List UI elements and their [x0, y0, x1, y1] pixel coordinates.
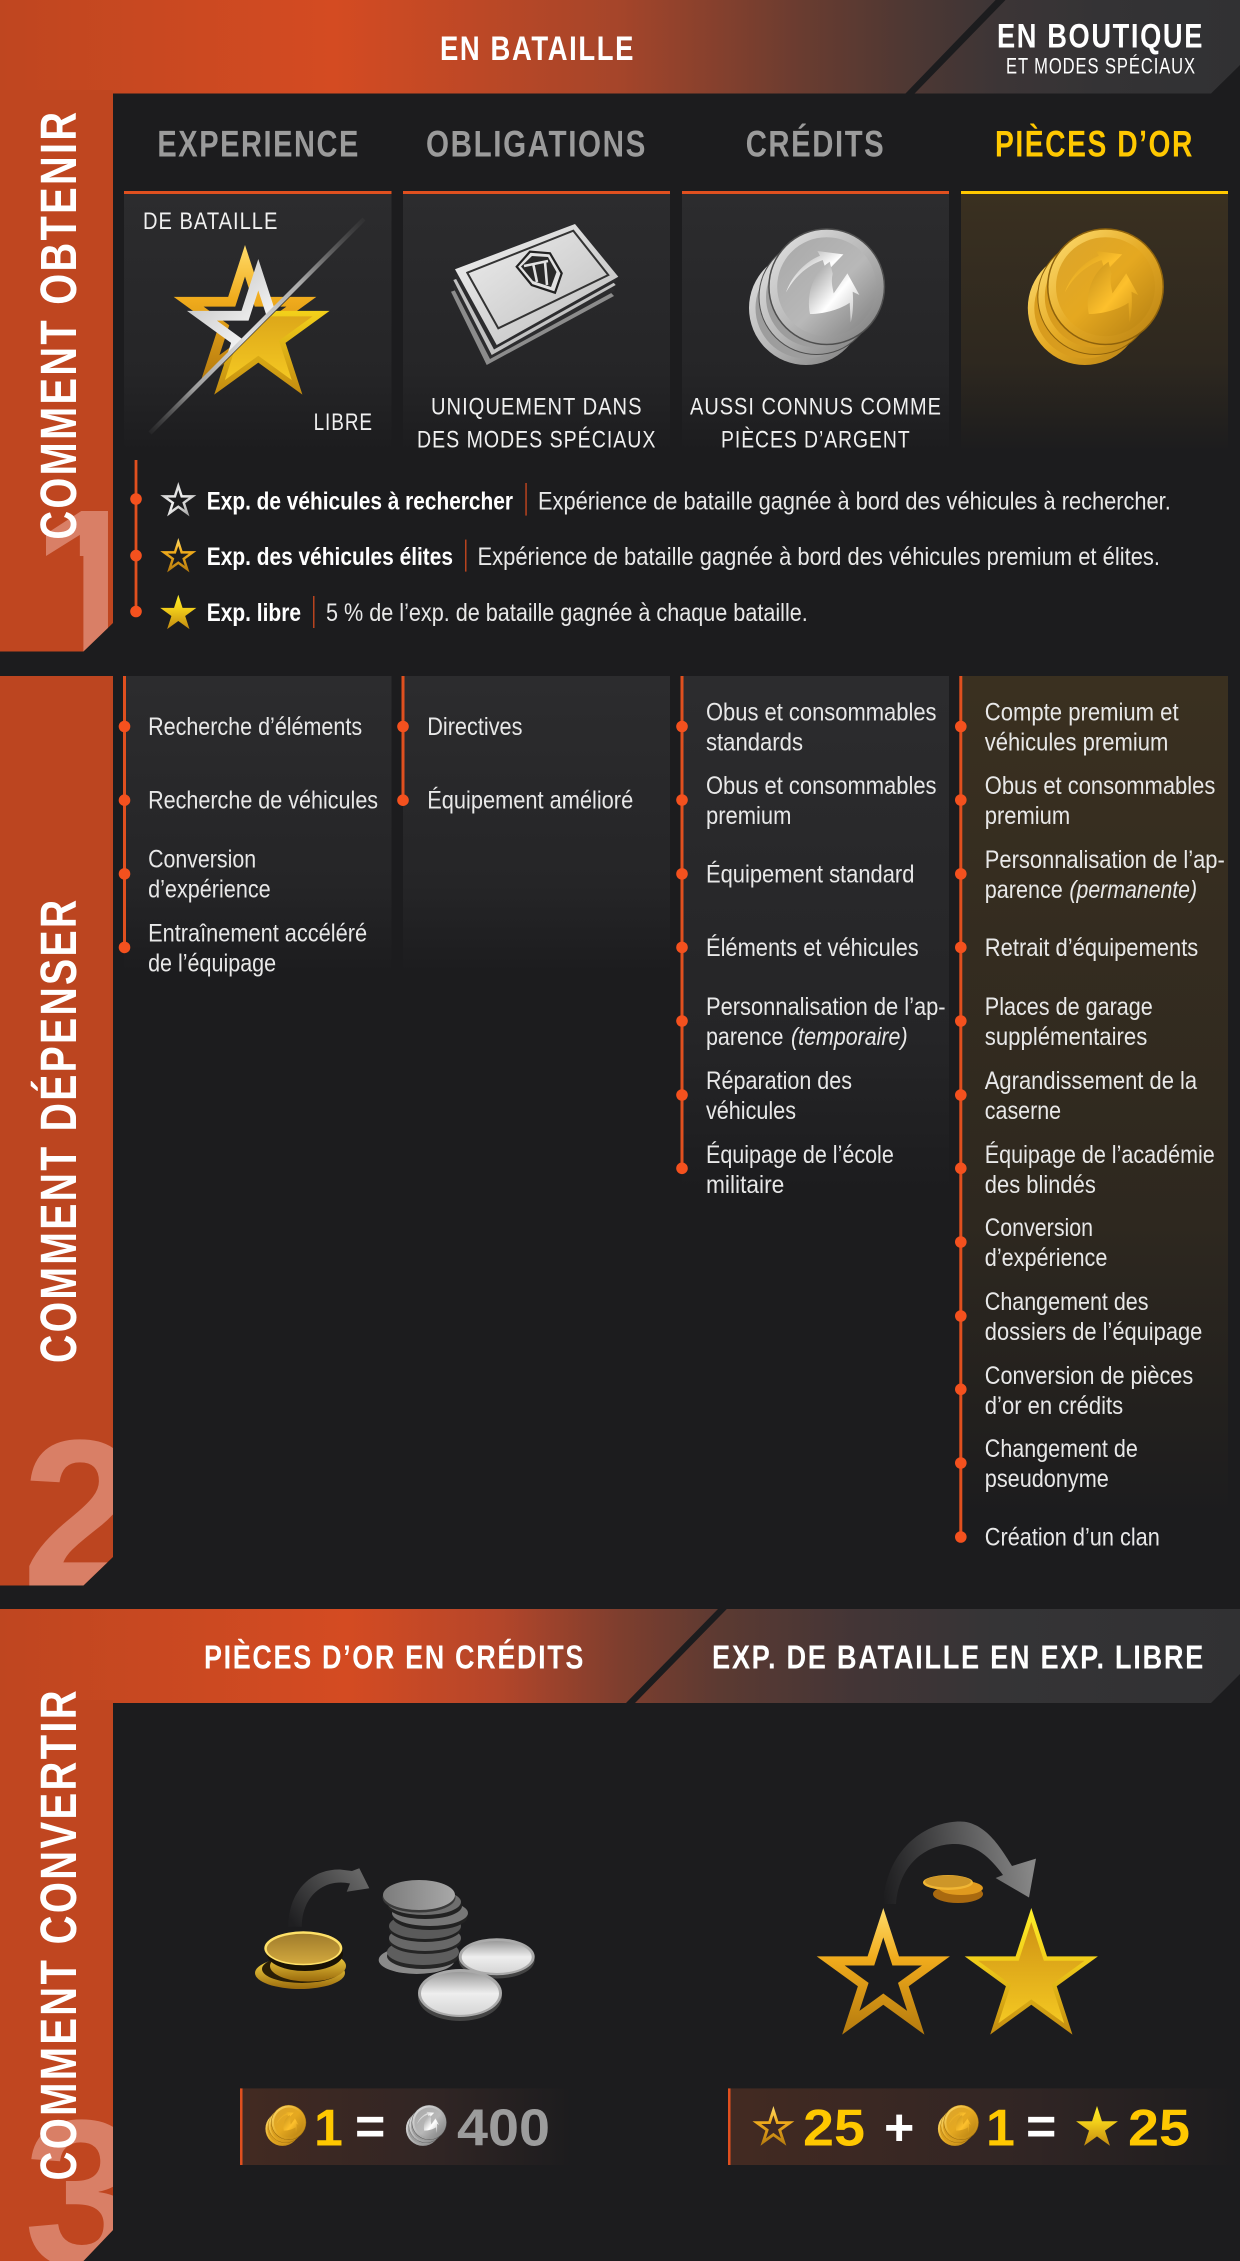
item: Agrandissement de la	[985, 1067, 1197, 1095]
icon: silver coins	[406, 2105, 447, 2146]
item: exp. de véhicules à rechercher	[130, 482, 1171, 516]
item: véhicules premium	[985, 728, 1168, 756]
header band: section 3	[0, 1609, 1240, 1703]
item: (temporaire)	[791, 1023, 908, 1051]
formula: 1 gold = 400 credits: =	[355, 2098, 385, 2156]
item: pseudonyme	[985, 1465, 1109, 1493]
item	[955, 1362, 1193, 1420]
item	[676, 698, 936, 756]
illustration: stars conversion	[817, 1822, 1098, 2035]
illustration: gold coins to silver coins	[255, 1868, 535, 2021]
item: Conversion	[148, 846, 256, 874]
item: exp. des véhicules élites: Exp. des véhicules élites	[207, 543, 453, 571]
item: Recherche de véhicules	[148, 786, 378, 814]
item	[119, 920, 367, 978]
icon: outline star	[752, 2106, 794, 2146]
gold stack	[255, 1931, 346, 1989]
item: parence	[706, 1023, 783, 1051]
icon: gold coins	[938, 2105, 979, 2146]
item: Changement de	[985, 1435, 1138, 1463]
item: Équipement amélioré	[427, 786, 633, 814]
icon: filled star	[1076, 2106, 1118, 2146]
item: exp. libre	[130, 595, 808, 629]
item: Changement des	[985, 1288, 1148, 1316]
star: free experience	[965, 1908, 1098, 2035]
panel: experience	[124, 191, 392, 452]
item: Places de garage	[985, 993, 1153, 1021]
silver stack	[379, 1880, 468, 1974]
item: Conversion de pièces	[985, 1362, 1193, 1390]
caption: aussi connus comme pièces d'argent: AUSSI CONNUS COMME	[690, 394, 942, 421]
item	[955, 1214, 1107, 1272]
formula: 25 exp + 1 gold = 25 free exp: =	[1026, 2098, 1056, 2156]
item	[676, 1067, 852, 1125]
item: exp. libre: 5 % de l’exp. de bataille gagnée à chaque bataille.	[326, 599, 808, 627]
panel: pieces d'or	[961, 191, 1228, 452]
icon: bond notes	[451, 224, 618, 365]
item: Conversion	[985, 1214, 1093, 1242]
item	[397, 713, 522, 741]
vertical title: comment obtenir: COMMENT OBTENIR	[30, 110, 87, 540]
spend list: obligations	[397, 676, 670, 974]
item	[955, 772, 1215, 830]
item	[955, 993, 1153, 1051]
item: Compte premium et	[985, 698, 1179, 726]
side bar: comment obtenir	[0, 94, 113, 652]
item: premium	[985, 802, 1070, 830]
vertical title: comment convertir: COMMENT CONVERTIR	[30, 1688, 87, 2180]
heading: en bataille: EN BATAILLE	[440, 30, 635, 68]
caption: uniquement dans des modes spéciaux: UNIQUEMENT DANS	[431, 394, 642, 421]
vertical title: comment dépenser: COMMENT DÉPENSER	[30, 897, 87, 1363]
item	[119, 846, 271, 904]
icon: silver coins	[749, 228, 885, 365]
item: Création d’un clan	[985, 1524, 1160, 1552]
icon: split star	[148, 218, 366, 434]
caption: aussi connus comme pièces d'argent: PIÈCES D’ARGENT	[721, 426, 911, 453]
item	[676, 1140, 894, 1199]
header band: section 1	[0, 0, 1240, 94]
item: exp. des véhicules élites: Expérience de bataille gagnée à bord des véhicules premium et élites.	[478, 543, 1160, 571]
item: d’expérience	[148, 876, 271, 904]
item: (permanente)	[1069, 876, 1197, 904]
item: exp. de véhicules à rechercher: Exp. de véhicules à rechercher	[207, 487, 513, 515]
item: premium	[706, 802, 791, 830]
item	[955, 846, 1225, 904]
section number 1: 1	[32, 467, 146, 696]
label: libre: LIBRE	[314, 409, 373, 436]
item	[676, 993, 946, 1051]
arrow	[883, 1822, 1036, 1904]
item: Directives	[427, 713, 522, 741]
item: dossiers de l’équipage	[985, 1318, 1202, 1346]
item: caserne	[985, 1097, 1061, 1125]
item: Recherche d’éléments	[148, 713, 362, 741]
section number 2: 2	[22, 1396, 139, 1631]
item: de l’équipage	[148, 950, 276, 978]
item	[955, 698, 1179, 756]
item	[955, 1067, 1197, 1125]
spend list: experience	[119, 676, 391, 978]
spend list: pieces d'or	[955, 676, 1228, 1552]
spend list: credits	[676, 676, 949, 1199]
item: Obus et consommables	[706, 772, 936, 800]
silver loose coins	[418, 1938, 535, 2021]
formula: 1 gold = 400 credits: 1	[314, 2100, 343, 2158]
formula: 25 exp + 1 gold = 25 free exp: +	[884, 2099, 914, 2157]
formula: 25 exp + 1 gold = 25 free exp: 25	[803, 2100, 865, 2158]
formula: 1 gold = 400 credits: 400	[457, 2100, 550, 2158]
item	[955, 1288, 1202, 1346]
item: militaire	[706, 1171, 784, 1199]
item: Réparation des	[706, 1067, 852, 1095]
icon: gold coins	[265, 2105, 306, 2146]
heading: pièces d'or en crédits: PIÈCES D’OR EN CRÉDITS	[204, 1639, 585, 1676]
column titles: CRÉDITS	[746, 124, 885, 165]
star: battle experience	[817, 1908, 950, 2035]
caption: uniquement dans des modes spéciaux	[417, 394, 656, 453]
item	[955, 1435, 1138, 1493]
side bar: comment convertir	[0, 1691, 113, 2261]
item	[955, 1140, 1215, 1199]
item: supplémentaires	[985, 1023, 1147, 1051]
icon: shield logo	[517, 252, 562, 293]
side bar: comment dépenser	[0, 676, 113, 1586]
item: Équipage de l’école	[706, 1140, 894, 1169]
item: Équipement standard	[706, 860, 914, 888]
caption: uniquement dans des modes spéciaux: DES MODES SPÉCIAUX	[417, 426, 656, 453]
formula: 1 gold = 400 credits	[240, 2088, 573, 2165]
panel: credits	[682, 191, 949, 453]
item: Personnalisation de l’ap-	[706, 993, 946, 1021]
label: de bataille: DE BATAILLE	[143, 208, 278, 235]
column titles: OBLIGATIONS	[426, 124, 647, 165]
item: Obus et consommables	[985, 772, 1215, 800]
item: parence	[985, 876, 1063, 904]
column titles: EXPERIENCE	[157, 124, 360, 165]
item: Entraînement accéléré	[148, 920, 367, 948]
item: d’or en crédits	[985, 1392, 1123, 1420]
gold coin stack	[923, 1875, 983, 1903]
item: véhicules	[706, 1097, 796, 1125]
heading: en boutique	[997, 18, 1204, 79]
list: experience types	[130, 460, 1171, 629]
item	[676, 772, 936, 830]
caption: aussi connus comme pièces d'argent	[690, 394, 942, 453]
item: d’expérience	[985, 1244, 1107, 1272]
item: standards	[706, 728, 803, 756]
item: Retrait d’équipements	[985, 934, 1198, 962]
formula: 25 exp + 1 gold = 25 free exp: 1	[986, 2100, 1015, 2158]
item: Obus et consommables	[706, 698, 936, 726]
column titles	[157, 124, 1194, 165]
panel: obligations	[403, 191, 670, 453]
formula: 25 exp + 1 gold = 25 free exp: 25	[1128, 2100, 1190, 2158]
arrow	[288, 1868, 369, 1927]
item: exp. libre: Exp. libre	[207, 599, 301, 627]
item: exp. des véhicules élites	[130, 538, 1160, 572]
item: Éléments et véhicules	[706, 933, 919, 962]
item: des blindés	[985, 1171, 1096, 1199]
formula: 25 exp + 1 gold = 25 free exp	[728, 2088, 1240, 2165]
icon: gold coins	[1028, 228, 1164, 365]
